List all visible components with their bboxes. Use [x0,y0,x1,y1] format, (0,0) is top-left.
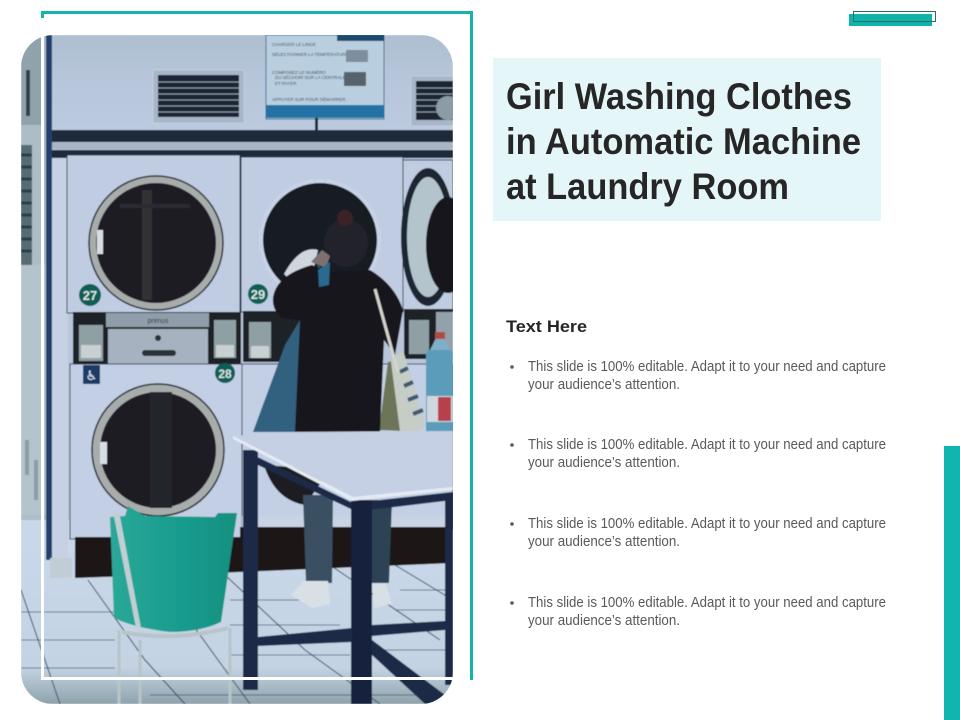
dryer door 27 [89,176,223,310]
right edge accent bar [944,446,960,720]
water bottle [426,332,453,435]
blue vertical pillar [46,35,52,560]
dark horizontal rails [52,130,453,158]
instruction sign: DU SÉCHOIR SUR LA CENTRALE [275,74,346,80]
tote bag [379,361,400,432]
teal outer frame [41,12,472,680]
bullet 3: This slide is 100% editable. Adapt it to your need and capture [528,515,886,532]
bullet list [510,358,886,629]
bullet 4 [510,594,886,629]
dryer door 28 [92,384,224,516]
lower machine panels [70,364,453,539]
number badge 29 [248,284,268,304]
machine base [75,516,453,578]
title block: in Automatic Machine [506,121,861,162]
subheading: Text Here [506,317,587,336]
title block [493,58,881,221]
control panel 27: primus [147,318,169,325]
control panel 27 [73,312,241,365]
bullet 1: your audience’s attention. [528,376,680,393]
bullet 2: This slide is 100% editable. Adapt it to your need and capture [528,436,886,453]
title block: Girl Washing Clothes [506,76,852,117]
bullet 2 [510,436,886,471]
control panel 29 [243,309,453,362]
instruction sign: ET PAYER [275,81,297,86]
table [233,431,453,704]
photo: laundry room [21,35,470,704]
woman washing clothes [253,210,425,608]
instruction sign: SÉLECTIONNER LA TEMPÉRATURE [272,51,348,57]
number badge 27: 27 [83,288,97,303]
bullet 2: your audience’s attention. [528,454,680,471]
upper machine panels [67,155,453,313]
number badge 28 [215,363,235,383]
legs [303,495,333,583]
wall above machines [52,36,446,48]
bullet 1 [510,358,886,393]
open dryer door [400,168,453,306]
instruction sign: APPUYER SUR POUR DÉMARRER [272,96,346,102]
shoes [291,581,330,608]
wall vent right [412,76,453,126]
instruction sign [266,35,384,132]
instruction sign: CHARGER LE LINGE [272,42,316,47]
number badge 28: 28 [218,367,232,381]
wall vent left [153,70,244,123]
left side cabinet [21,35,46,565]
stool [119,628,230,704]
head [324,219,368,267]
door behind table [264,465,322,506]
bullet 3: your audience’s attention. [528,533,680,550]
number badge 27 [79,284,101,306]
wheelchair sign [83,365,100,384]
bullet 1: This slide is 100% editable. Adapt it to your need and capture [528,358,886,375]
blue garment [252,265,321,432]
top-right accent [849,12,936,26]
dryer door 29, open drum [260,180,380,283]
teal laundry bucket [110,506,237,632]
bullet 4: This slide is 100% editable. Adapt it to your need and capture [528,594,886,611]
bullet 3 [510,515,886,550]
bullet 4: your audience’s attention. [528,612,680,629]
instruction sign: COMPOSEZ LE NUMÉRO [272,69,326,75]
number badge 29: 29 [251,287,265,302]
white inner frame [42,36,453,678]
wheelchair sign: ♿ [86,369,97,384]
floor tiles [21,520,453,704]
jacket [273,265,403,432]
title block: at Laundry Room [506,166,789,207]
